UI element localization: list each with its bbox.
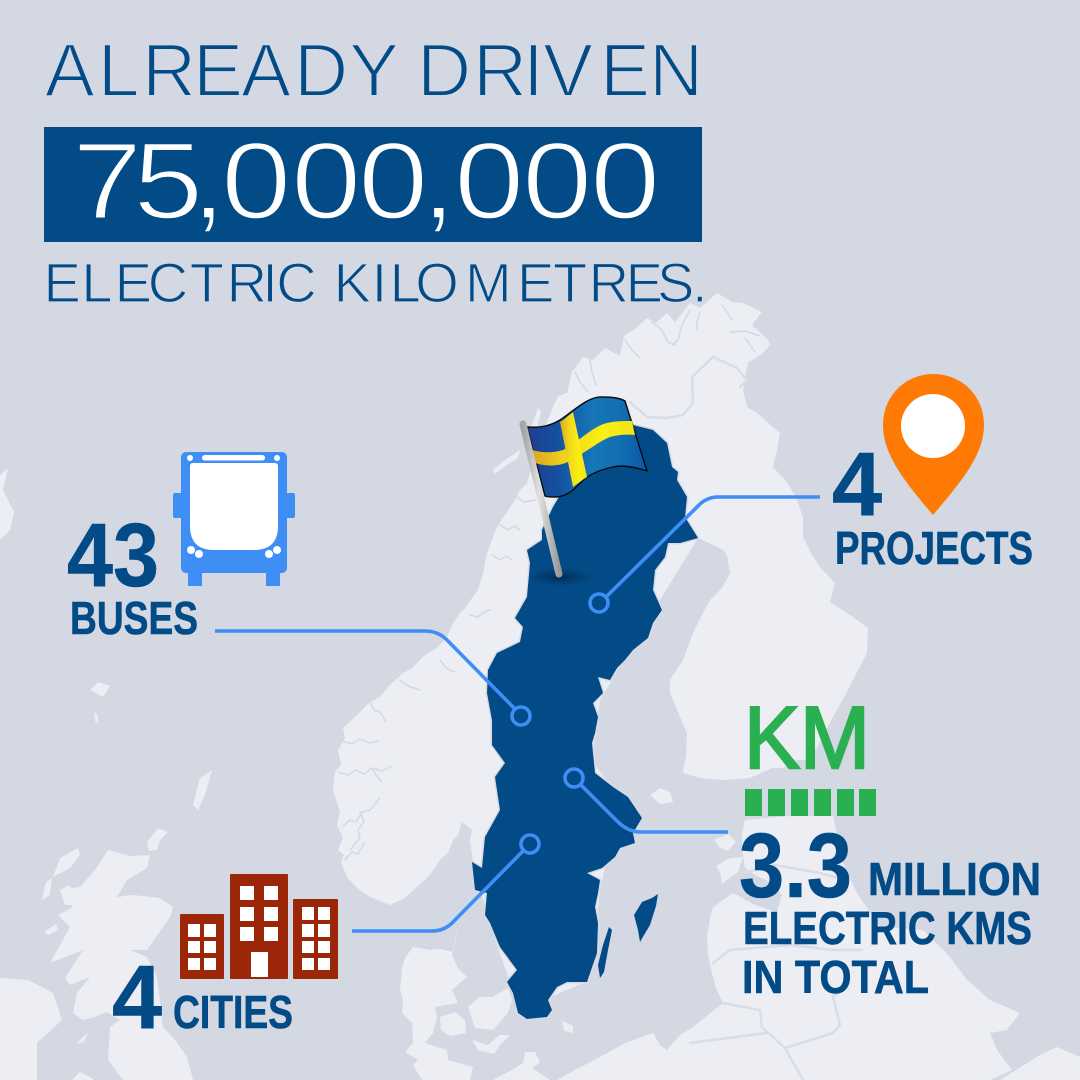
icon: bus — [173, 452, 295, 586]
stat: 4 cities: 4 — [112, 948, 162, 1048]
stat: 3.3 million electric kms in total — [739, 815, 1041, 1003]
subtitle: electric kilometres: ELECTRIC KILOMETRES. — [44, 251, 708, 314]
land: Zealand — [468, 988, 512, 1030]
stat: 4 projects: 4 — [832, 435, 882, 535]
land: Lolland — [472, 1035, 510, 1054]
land: Estonian islands — [714, 834, 743, 884]
icon: city buildings — [180, 874, 338, 979]
Gotland — [634, 894, 658, 942]
stat: 3.3 million electric kms in total: 3.3 — [739, 815, 852, 917]
Oland — [598, 927, 612, 978]
stat: 43 buses: BUSES — [70, 592, 198, 644]
land: German coast — [493, 1052, 550, 1080]
land: far south-east corner — [1000, 1047, 1080, 1080]
stat: 4 cities: CITIES — [173, 986, 293, 1038]
icon: KM odometer: KM — [744, 688, 870, 787]
icon: map pin — [883, 374, 984, 515]
land: Norway, Finland and northern Scandinavia — [333, 293, 868, 1010]
stat: 43 buses: 43 — [67, 506, 159, 606]
land: Baltic states and Poland — [557, 816, 1020, 1080]
stat: 3.3 million electric kms in total: IN TOTAL — [742, 951, 929, 1003]
icon: Swedish flag on pole — [523, 397, 647, 586]
leader line: kilometres — [565, 769, 728, 832]
banner: 75,000,000: 75,000,000 — [72, 120, 660, 243]
land: Funen — [440, 1012, 466, 1036]
leader line: buses — [215, 631, 530, 725]
land: Lofoten islands — [493, 408, 541, 474]
land: Scottish islands — [42, 770, 212, 935]
land: Isle of Man and Wales — [72, 1032, 94, 1080]
land: Faroe islands — [90, 682, 110, 724]
stat: 3.3 million electric kms in total: ELECTRIC KMS — [743, 902, 1032, 954]
map: fjords, islands and borders — [338, 305, 862, 1080]
stat: 3.3 million electric kms in total: MILLION — [868, 853, 1041, 905]
stat: 4 cities — [112, 948, 293, 1048]
stat: 43 buses — [67, 506, 198, 644]
land: Jutland — [400, 927, 473, 1080]
stat: 4 projects: PROJECTS — [835, 522, 1033, 574]
leader line: projects — [590, 497, 820, 612]
land: Ireland — [0, 978, 62, 1080]
map: Sweden highlighted — [472, 425, 698, 1019]
map: surrounding land — [0, 293, 1080, 1080]
title: already driven: ALREADY DRIVEN — [45, 28, 703, 112]
leader line: cities — [352, 835, 539, 931]
land: Bornholm — [562, 1021, 573, 1033]
Sweden mainland — [472, 425, 698, 1019]
stat: 4 projects — [832, 435, 1033, 574]
land: Aland islands — [650, 788, 673, 804]
land: Scotland and England — [50, 850, 193, 1080]
land: Iceland edge — [0, 468, 14, 540]
